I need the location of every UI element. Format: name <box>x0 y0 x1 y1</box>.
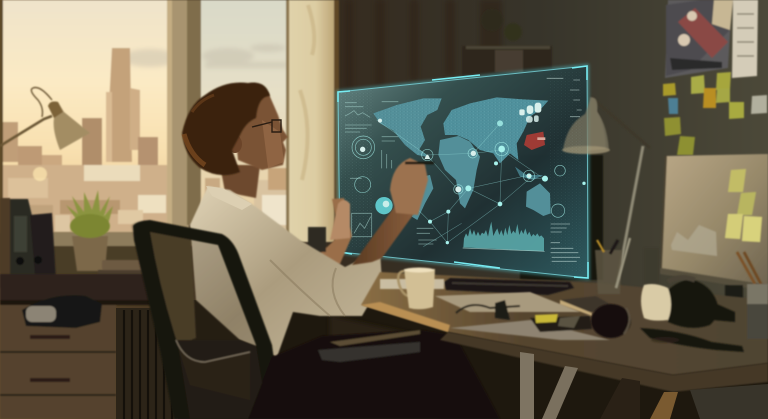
lamp head seen through panel <box>562 98 610 154</box>
right monitor with sticky notes <box>660 154 768 325</box>
seat and trousers <box>248 330 500 419</box>
dark drapes <box>345 0 502 90</box>
round device <box>591 304 631 338</box>
office chair <box>131 220 500 419</box>
sleeve shading <box>270 260 345 316</box>
desk legs <box>520 352 534 419</box>
sheer curtain <box>289 0 339 250</box>
window sill <box>0 232 200 274</box>
bright near edge <box>361 302 450 332</box>
collar <box>206 186 252 210</box>
skyline <box>3 48 288 235</box>
lower mesh <box>176 340 282 419</box>
poster <box>665 0 732 78</box>
continents <box>373 97 551 220</box>
dark monitor behind hologram <box>520 155 603 280</box>
hair <box>182 82 270 175</box>
papers and glasses on desk <box>435 292 620 340</box>
cables and device on desk <box>640 328 744 352</box>
paper sheet <box>732 0 758 78</box>
metal mesh pencil holder <box>737 252 768 339</box>
data columns right <box>547 78 582 261</box>
head face <box>232 92 288 170</box>
back arm, second hand <box>308 198 352 268</box>
raised forearm <box>352 206 418 265</box>
teal badge <box>375 197 393 214</box>
desk front <box>440 332 768 392</box>
radiator <box>116 308 178 419</box>
main desk <box>361 272 768 419</box>
map speckle texture <box>340 70 583 273</box>
hologram world map panel <box>338 66 610 278</box>
ear <box>228 135 242 153</box>
map and widgets, zoom coordinates <box>340 70 586 273</box>
panel body <box>338 66 588 278</box>
panel edge <box>338 66 588 278</box>
left widgets <box>345 102 437 244</box>
left frame <box>133 220 282 419</box>
shelf with plant <box>462 9 552 76</box>
glasses <box>252 120 281 132</box>
notebook and sticky pad <box>530 316 592 332</box>
keyboard <box>380 278 574 295</box>
panel glow <box>338 66 588 278</box>
raised hand and stylus <box>390 158 434 215</box>
desk surface <box>361 272 768 375</box>
room shadow below desk <box>178 300 768 419</box>
left desk and cabinet <box>0 274 160 419</box>
map nodes <box>428 120 586 244</box>
neck <box>220 165 260 198</box>
coffee mug <box>398 268 435 309</box>
potted plant <box>66 190 113 271</box>
red hotspot <box>524 132 545 150</box>
bar chart <box>463 222 544 251</box>
headset on cabinet <box>22 295 102 328</box>
lumbar support <box>176 340 250 400</box>
stack of books <box>92 260 152 287</box>
shirt torso and sleeve <box>190 186 382 357</box>
armrest <box>318 342 420 362</box>
lower wall between desk legs <box>330 316 440 419</box>
glints <box>33 167 47 181</box>
table lamp in window <box>0 88 90 150</box>
mesh back <box>131 220 280 419</box>
tablet keyboard <box>560 296 620 312</box>
window frame <box>167 0 177 235</box>
pen cup <box>595 238 659 294</box>
network links <box>377 120 545 247</box>
user icons <box>360 103 541 192</box>
wall poster and notes <box>663 0 767 155</box>
VR headset <box>641 277 735 328</box>
sticky notes <box>663 83 676 96</box>
person <box>182 82 434 357</box>
mesh left of shirt <box>148 230 196 345</box>
clouds <box>122 44 287 68</box>
window with city view <box>0 0 290 240</box>
bookshelf binders, left desk <box>0 198 56 288</box>
desk lamp on right, behind hologram <box>586 97 650 280</box>
